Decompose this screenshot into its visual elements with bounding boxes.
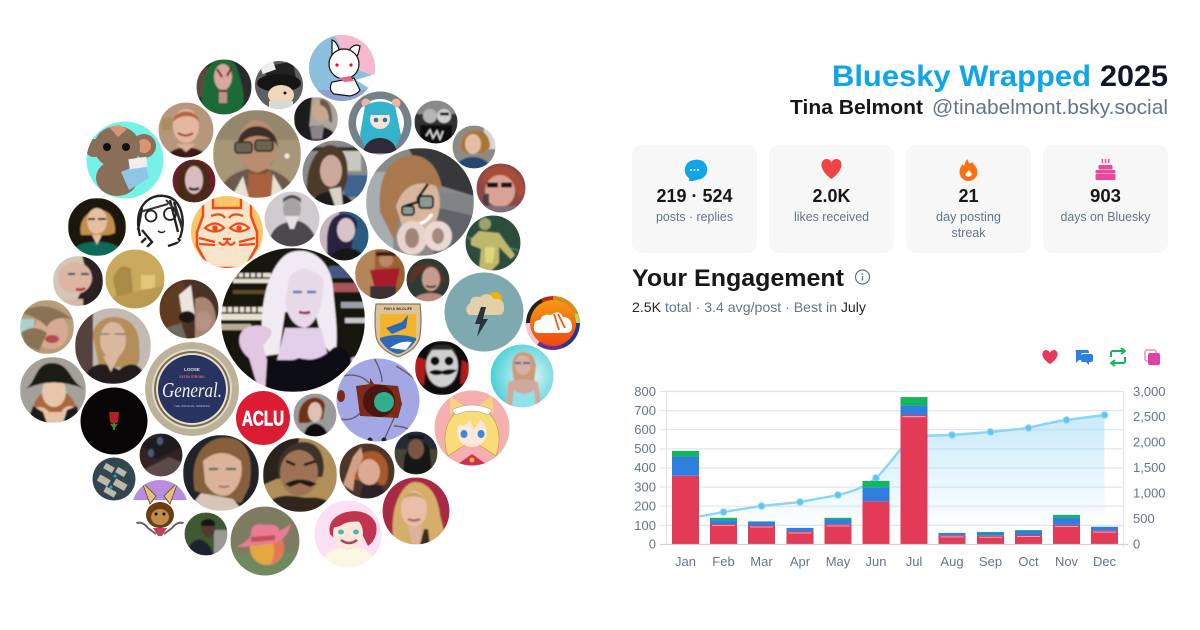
cumulative area — [686, 415, 1104, 544]
avatar: dark room portrait — [394, 431, 438, 475]
avatar: man with dark mustache — [263, 438, 337, 512]
left axis labels — [634, 384, 656, 552]
icon: heart — [821, 159, 842, 179]
avatar: brown hair woman close up — [183, 435, 259, 511]
left axis labels: 0 — [649, 536, 656, 552]
chart legend icons — [1042, 348, 1160, 366]
avatar: man with glasses — [213, 110, 301, 198]
panel: stat card likes received — [769, 145, 894, 253]
panel: stat card likes received: 2.0K — [812, 186, 850, 206]
avatar: teal lit woman — [490, 344, 554, 408]
user name and handle: Tina Belmont — [790, 97, 923, 119]
icon: reply — [1076, 350, 1093, 365]
avatar: blue cartoon machine — [336, 358, 420, 442]
avatar: old sepia photo — [264, 191, 320, 247]
avatar: ACLU logo: ACLU — [242, 408, 284, 430]
left axis labels: 600 — [634, 422, 656, 437]
avatar: General snus tin — [145, 342, 239, 436]
x axis month labels: Aug — [940, 554, 964, 569]
title: Bluesky Wrapped — [832, 60, 1091, 93]
avatar: brown hair selfie in vehicle — [302, 140, 368, 206]
avatar: wide-brim hat woman — [20, 357, 86, 423]
avatar: bunny plush — [309, 35, 375, 102]
x axis month labels: Apr — [790, 554, 811, 569]
avatar: ACLU logo — [236, 391, 290, 445]
avatar: big selfie with glasses and headphones — [366, 148, 474, 256]
avatar: monkey with typewriter — [85, 121, 164, 199]
avatar: line-art sketch — [136, 194, 184, 248]
avatar: General snus tin: EXTRA STRONG — [179, 375, 205, 379]
avatar: dog and person — [159, 279, 219, 339]
x axis month labels: Jul — [906, 554, 922, 569]
icon: info — [856, 270, 870, 284]
icon: flame — [960, 159, 978, 181]
icon: repost — [1111, 348, 1125, 366]
avatar: blowing hair woman — [20, 300, 74, 354]
avatar: curly haired woman — [452, 125, 496, 169]
cumulative line — [686, 415, 1104, 519]
avatar: rainbow ring cloud — [526, 296, 580, 350]
right axis labels: 2,500 — [1133, 409, 1166, 424]
left axis labels: 100 — [634, 518, 656, 533]
avatar: goth purple hair — [319, 211, 369, 261]
panel: stat card day posting streak — [906, 145, 1031, 253]
panel: stat card days on Bluesky: days on Bluesky — [1060, 209, 1151, 224]
line points — [720, 412, 1108, 515]
left axis labels: 500 — [634, 441, 656, 456]
left axis labels: 400 — [634, 460, 656, 475]
right axis labels: 1,500 — [1133, 460, 1166, 475]
title: 2025 — [1100, 60, 1168, 93]
x axis month labels: Jun — [866, 554, 886, 569]
panel: stat card likes received: likes received — [794, 209, 869, 224]
panel: stat card day posting streak: 21 — [958, 186, 979, 206]
avatar: gold coin relief — [105, 249, 165, 309]
right axis labels — [1133, 384, 1166, 552]
panel: stat card posts and replies — [632, 145, 757, 253]
left axis labels: 300 — [634, 480, 656, 494]
avatar: orange cat logo — [191, 196, 263, 268]
panel: stat card days on Bluesky: 903 — [1090, 186, 1121, 206]
x axis month labels: Oct — [1018, 554, 1039, 569]
panel: stat card posts and replies: 219 · 524 — [656, 186, 732, 206]
avatar: woman in green — [68, 198, 126, 256]
avatar: anime dark eyes — [139, 433, 183, 477]
avatar: green statue figure — [465, 215, 521, 271]
avatar: rose on black — [80, 388, 148, 454]
right axis labels: 1,000 — [1133, 486, 1166, 500]
avatar: red-haired woman — [158, 102, 214, 158]
avatar: woman arm raised — [339, 443, 395, 499]
avatar: aerial map — [92, 457, 136, 501]
avatar: mustache poster — [415, 341, 469, 395]
right axis labels: 2,000 — [1133, 434, 1166, 450]
avatar: General snus tin: THE ORIGINAL SWEDISH — [174, 404, 210, 408]
avatar: cartoon top hat — [255, 61, 303, 111]
x axis month labels: May — [826, 554, 851, 569]
avatar: black hoodie selfie — [294, 97, 338, 141]
avatar: peach wearing pink hat — [230, 506, 300, 577]
avatar: red hair anime woman — [314, 500, 382, 568]
avatar: General snus tin: General. — [162, 378, 222, 402]
x axis month labels: Mar — [750, 554, 773, 569]
chart: monthly engagement stacked bars with cumulative line — [634, 384, 1166, 569]
x axis month labels: Dec — [1093, 554, 1117, 569]
panel: avatar bubble cluster — [20, 35, 580, 577]
avatar: redhead black and white backdrop — [293, 393, 337, 437]
left axis labels: 200 — [634, 498, 656, 514]
avatar: small brunette — [172, 159, 216, 203]
right axis labels: 500 — [1133, 511, 1155, 526]
x axis month labels: Nov — [1055, 554, 1079, 569]
avatar: red hair sunglasses — [476, 163, 526, 214]
engagement summary: 2.5K total · 3.4 avg/post · Best in July — [632, 299, 866, 315]
panel: stat card posts and replies: posts · replies — [656, 209, 733, 224]
panel: stat card day posting streak: streak — [952, 225, 986, 240]
left axis labels: 800 — [634, 384, 656, 399]
avatar: red top photo — [355, 249, 405, 300]
avatar: bat character with purple top — [132, 480, 188, 536]
avatar: Miku mouse badge — [348, 91, 412, 155]
heading: your engagement: Your Engagement — [632, 265, 844, 292]
stacked bars — [672, 397, 1118, 544]
avatar: woman with piercing eyes — [53, 256, 103, 307]
avatar: central portrait blonde woman at keyboards — [221, 248, 365, 392]
icon: like — [1042, 350, 1058, 364]
avatar: blonde on red background — [382, 477, 450, 545]
panel: stat card days on Bluesky — [1043, 145, 1168, 253]
x axis month labels: Sep — [979, 554, 1002, 569]
avatar: black and white duo — [414, 100, 458, 145]
icon: quote — [1145, 350, 1160, 365]
avatar: man in dark shirt outdoors — [184, 512, 228, 556]
avatar: Fish and Wildlife badge — [375, 304, 421, 357]
user name and handle — [790, 97, 1168, 119]
user name and handle: @tinabelmont.bsky.social — [932, 97, 1168, 119]
left axis labels: 700 — [634, 403, 656, 418]
avatar: weather icon — [444, 272, 524, 352]
avatar: Fish and Wildlife badge: FISH & WILDLIFE — [384, 307, 413, 311]
avatar: green hair face paint — [196, 59, 252, 115]
x axis month labels: Feb — [712, 554, 735, 569]
avatar: dark hair pale face — [406, 258, 450, 302]
panel: stat card day posting streak: day posting — [936, 209, 1001, 224]
x axis month labels: Jan — [675, 554, 696, 569]
x axis month labels — [675, 554, 1117, 569]
avatar: blonde woman with glasses, black top — [75, 308, 151, 384]
avatar: blonde anime maid catgirl — [434, 390, 510, 466]
icon: chat bubble — [685, 160, 707, 181]
right axis labels: 0 — [1133, 536, 1140, 552]
right axis labels: 3,000 — [1133, 384, 1166, 399]
avatar: General snus tin: LOOSE — [184, 367, 200, 372]
icon: cake — [1096, 159, 1116, 180]
